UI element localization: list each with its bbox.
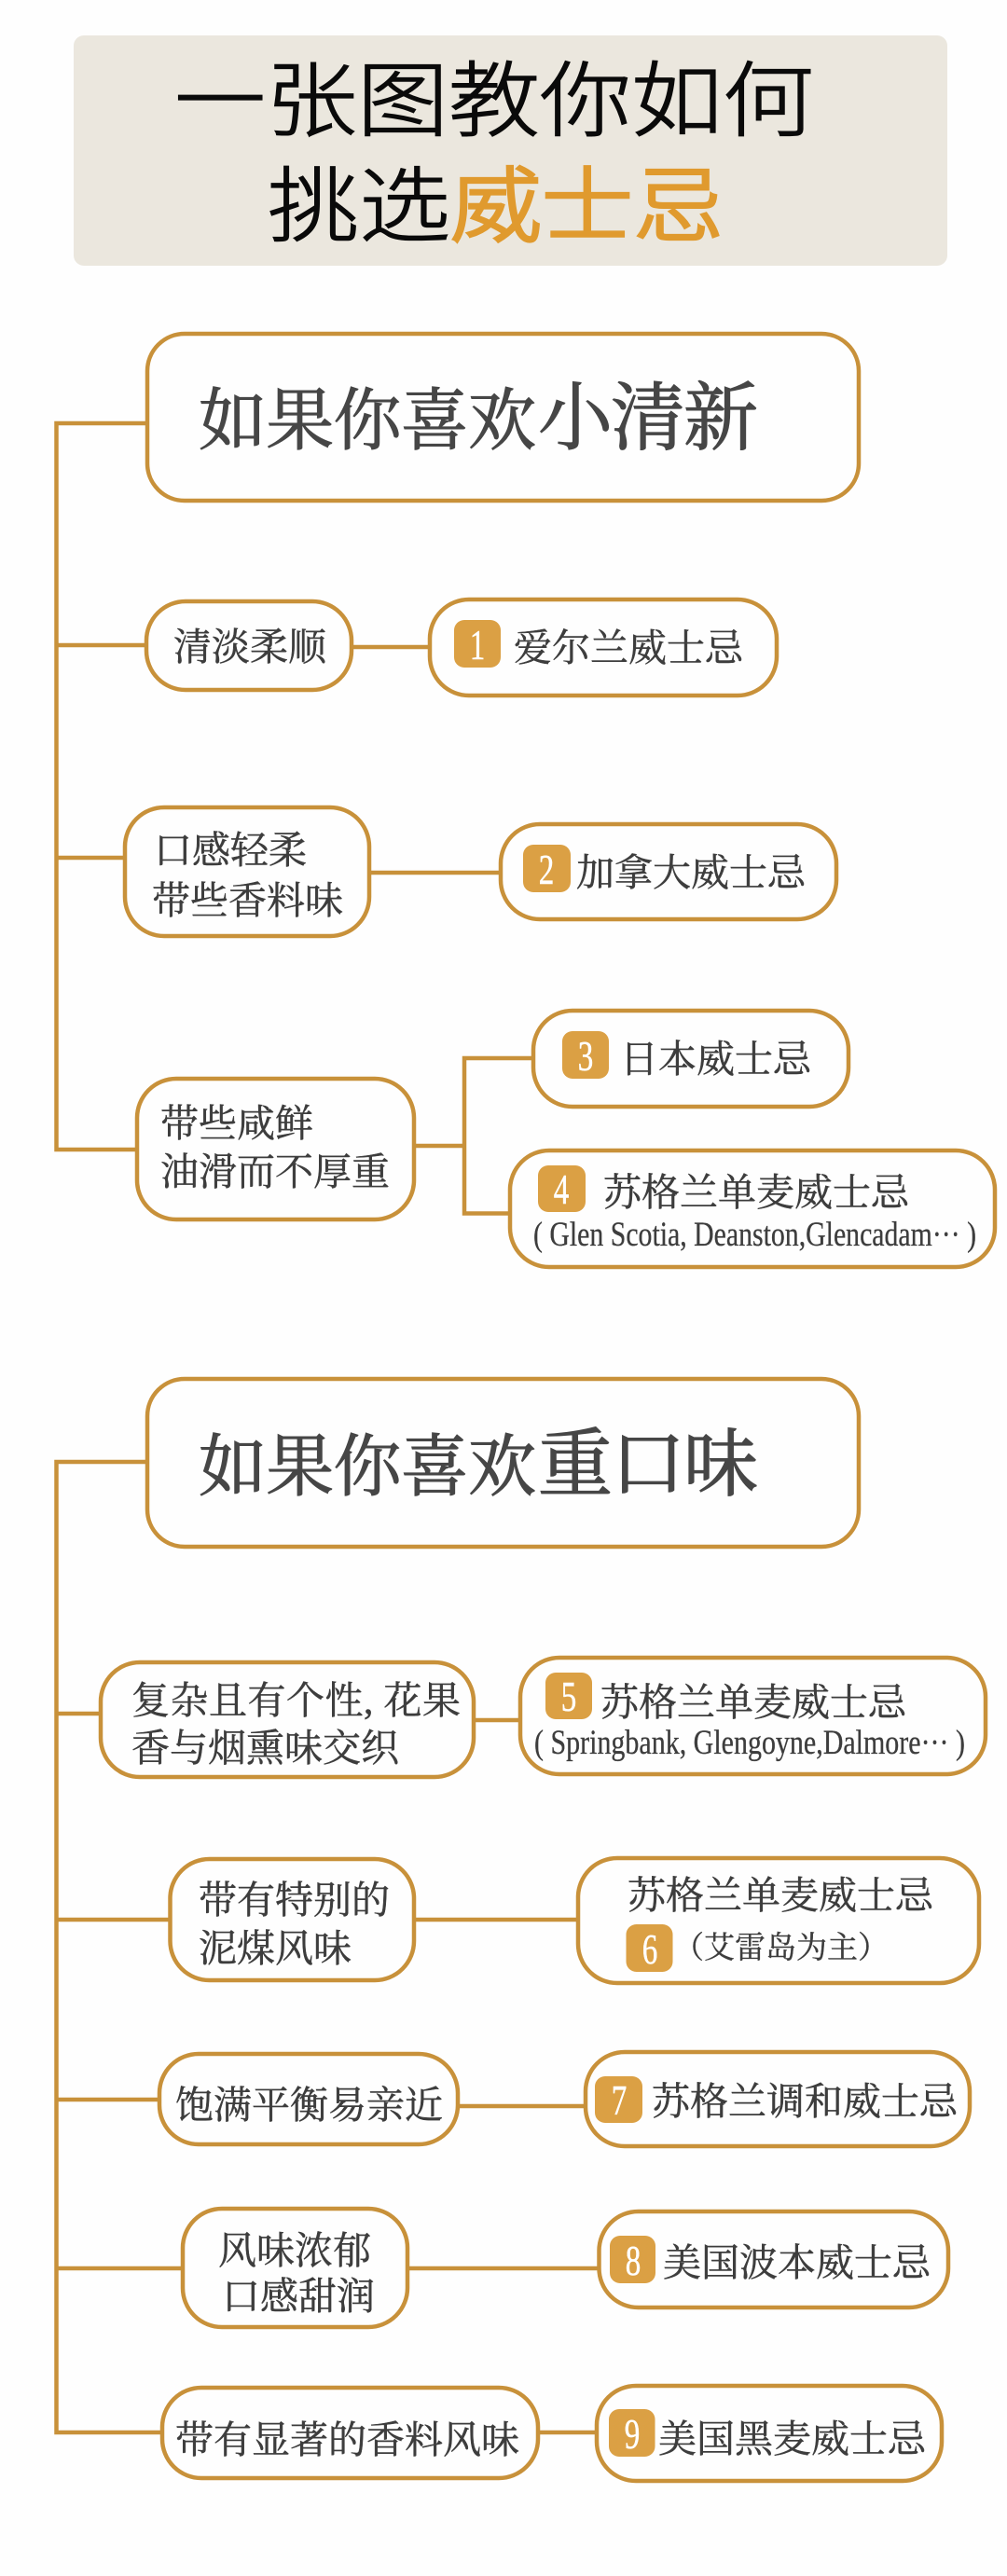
taste: soft with spice: 带些香料味	[152, 879, 343, 922]
option 2	[501, 824, 836, 919]
taste: peat: 泥煤风味	[199, 1927, 352, 1970]
taste: spicy	[162, 2388, 538, 2478]
taste: rich sweet	[183, 2209, 407, 2327]
option 9: 美国黑麦威士忌	[658, 2418, 927, 2460]
connector lines 2	[407, 1720, 599, 2432]
option 6: 6	[642, 1925, 657, 1973]
option 8: 8	[626, 2237, 641, 2284]
option 1	[430, 599, 777, 696]
option 6: （艾雷岛为主）	[673, 1931, 889, 1965]
taste: spicy: 带有显著的香料风味	[175, 2418, 519, 2461]
tree trunk 2	[56, 1462, 183, 2432]
option 2: 加拿大威士忌	[576, 851, 807, 894]
heading: light flavour: 如果你喜欢	[199, 383, 536, 459]
taste: rich sweet: 口感甜润	[222, 2275, 375, 2318]
heading: light flavour	[147, 334, 859, 501]
option 3: 日本威士忌	[620, 1038, 812, 1081]
option 5: 苏格兰单麦威士忌	[600, 1681, 907, 1724]
panel: light flavour	[56, 334, 995, 1267]
option 9	[597, 2386, 942, 2481]
taste: light smooth: 清淡柔顺	[173, 626, 327, 668]
option 6: 苏格兰单麦威士忌	[628, 1874, 934, 1917]
option 2: 2	[539, 846, 554, 893]
option 8	[599, 2211, 948, 2307]
taste: rich sweet: 风味浓郁	[218, 2229, 371, 2272]
tree trunk 1	[56, 423, 147, 1150]
option 3: 3	[578, 1032, 593, 1080]
option 8: 美国波本威士忌	[663, 2241, 931, 2284]
taste: slightly savoury: 带些咸鲜	[160, 1102, 313, 1145]
heading: light flavour: 小清新	[538, 379, 758, 461]
option 6	[578, 1858, 979, 1983]
option 5	[520, 1658, 986, 1774]
heading: strong flavour: 重口味	[538, 1425, 758, 1507]
option 4: 4	[554, 1165, 569, 1213]
taste: slightly savoury: 油滑而不厚重	[160, 1150, 390, 1193]
taste: complex: 复杂且有个性, 花果	[131, 1679, 461, 1722]
taste: peat	[170, 1859, 414, 1980]
option 5: 5	[561, 1673, 576, 1720]
option 4	[510, 1150, 995, 1267]
taste: light smooth	[146, 601, 352, 690]
option 1: 爱尔兰威士忌	[514, 627, 744, 669]
taste: balanced: 饱满平衡易亲近	[175, 2084, 443, 2127]
option 9: 9	[625, 2410, 640, 2458]
option 3	[533, 1011, 848, 1107]
taste: complex	[101, 1662, 474, 1777]
option 7	[586, 2052, 970, 2146]
option 7: 苏格兰调和威士忌	[652, 2080, 959, 2123]
taste: soft with spice: 口感轻柔	[154, 829, 307, 872]
taste: complex: 香与烟熏味交织	[131, 1727, 400, 1770]
title line 1: 一张图教你如何	[174, 56, 814, 147]
option 7: 7	[612, 2076, 627, 2124]
taste: soft with spice	[125, 807, 369, 936]
option 4: 苏格兰单麦威士忌	[603, 1171, 910, 1214]
option 1: 1	[470, 621, 485, 668]
taste: peat: 带有特别的	[199, 1879, 390, 1922]
title banner	[74, 35, 947, 266]
taste: slightly savoury	[137, 1079, 414, 1219]
heading: strong flavour: 如果你喜欢	[199, 1429, 536, 1505]
connector lines 1	[352, 647, 533, 1214]
title line 2: 挑选威士忌	[268, 161, 724, 253]
taste: balanced	[159, 2054, 458, 2144]
heading: strong flavour	[147, 1379, 859, 1547]
panel: strong flavour	[56, 1379, 986, 2481]
